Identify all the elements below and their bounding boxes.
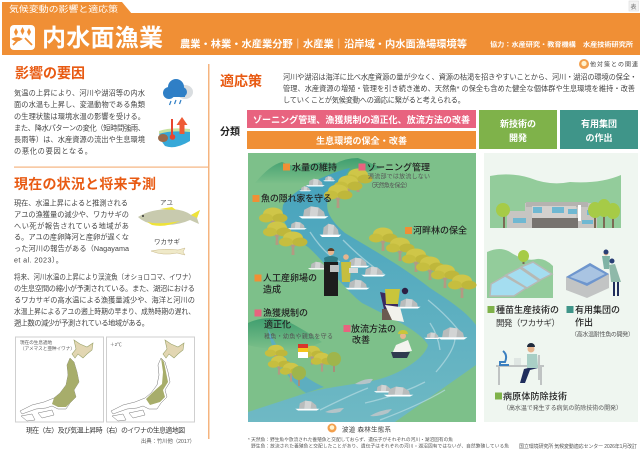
text: future projections: るワカサギの高水温による漁獲量減少や、海洋と河川の [14,296,195,304]
legend: forest ecosystem link [328,424,392,434]
label: pathogen control [495,390,622,412]
category bar: habitat [247,131,476,149]
measure labels: 放流方法の [351,323,396,334]
icon: ayu fish [138,198,200,226]
measure labels: （天然魚を保全） [368,182,411,190]
text: adaptation intro: していくことが気候変動への適応に繋がると考えられる。 [283,96,465,104]
cooperating organisations: 協力：水産研究・教育機構 水産技術研究所 [490,40,634,48]
text: causes body: 長雨等）は、水産資源の流出や生息環境 [14,135,145,144]
text: current status: へい死が報告されている地域があ [14,221,129,230]
column divider [208,64,210,439]
measure labels: 改善 [352,334,370,345]
legend: forest ecosystem link: 波道 森林生態系 [342,424,392,434]
section divider [14,166,208,168]
icon: temperature rise and river [158,117,190,147]
fish in the river [325,379,392,416]
rocks [288,176,467,410]
text: adaptation intro: 河川や湖沼は海洋に比べ水産資源の量が少なく、資源の枯渇を招きやすいことから、河川・湖沼の環境の保全・ [283,72,637,82]
water streaks [310,232,462,420]
category bar: zoning: ゾーニング管理、漁獲規制の適正化、放流方法の改善 [253,114,470,125]
illustration: research facility [490,174,621,228]
text: causes body: の生理状態は環境水温の影響を受ける。 [14,112,145,121]
panel: adaptation measures [220,72,638,422]
panel: causes [14,65,193,156]
label: seed production: 種苗生産技術の [496,304,559,315]
text: causes body: の悪化の要因となる。 [14,146,92,156]
text: current status: った河川の報告がある（Nagayama [14,244,129,253]
trees [259,168,476,386]
text: current status: et al. 2023）。 [14,256,63,264]
river [248,168,476,422]
category box: new technology: 開発 [509,132,527,143]
text: future projections: 将来、河川水温の上昇により渓流魚（オショロコマ、イワナ） [14,272,195,282]
text: adaptation intro [283,72,637,104]
measure labels: ゾーニング管理 [367,162,430,172]
measure labels: 魚の隠れ家を守る [261,192,332,204]
label: useful strains: 作出 [575,316,593,328]
text: causes body [14,88,146,156]
label: pathogen control: （高水温で発生する病気の防除技術の開発） [503,404,622,412]
measure labels: 河畔林の保全 [413,224,467,236]
map: current: （アメマスと亜种イワナ） [20,345,75,352]
measure labels: 水量の維持 [292,162,337,172]
measure labels: 造成 [263,284,281,294]
caption: 現在（左）及び気温上昇時（右）のイワナの生息適地図 [26,426,185,434]
footnote: * 天然魚：野生魚や放流された養殖魚と交配しておらず、遺伝子がそれぞれの河川・湖沼固有の魚 [248,436,453,443]
footnote [248,436,509,450]
panel: current status and projections [14,176,200,328]
illustration: fish ponds [487,249,553,298]
small corner tag [629,1,638,11]
category box: new technology: 新技術の [500,118,536,129]
text: future projections [14,272,195,328]
header tab: 気候変動の影響と適応策 [9,3,118,14]
legend: link to other measures [579,59,638,69]
credit: 国立環境研究所 気候変動適応センター 2026年1月改訂 [519,443,637,450]
label: seed production [488,304,560,328]
illustration: tank and researchers [566,250,621,298]
icon: wakasagi fish [151,238,185,255]
text: future projections: 遡上数の減少が予測されている地域がある。 [14,318,149,328]
icon: fish and water [10,25,35,50]
text: current status [14,198,129,264]
label: pathogen control: 病原体防除技術 [503,390,567,402]
illustration: river environment [248,153,476,422]
source: 出典：竹川他（2017） [141,437,195,445]
icon: ayu fish: アユ [160,198,173,206]
map: plus two degrees [106,337,194,422]
panel: technology and strains [484,153,638,422]
measure labels: 漁獲規制の [263,307,308,318]
label: seed production: 開発（ワカサギ） [496,318,560,328]
sign [298,344,308,358]
heading: adaptation: 適応策 [220,73,262,89]
people [324,248,412,358]
text: adaptation intro: 管理、水産資源の増殖・管理を引き続き進め、天然魚* の保全も含めた健全な個体群や生息環境を維持・改善 [283,84,635,93]
text: causes body: 面の水温も上昇し、変温動物である魚類 [14,100,146,109]
label: useful strains [566,304,634,338]
title: 内水面漁業 [42,25,163,52]
text: future projections: 水温上昇によるアユの遡上時期の早まり、成熟時期の遅れ、 [14,307,195,316]
measure labels: 源流部では放流しない [368,172,430,180]
heading: status: 現在の状況と将来予測 [14,176,156,192]
measure labels: 稚魚・幼魚や親魚を守る [264,332,333,340]
category box: useful strains: 有用集団 [581,118,617,129]
text: current status: 現在、水温上昇によると推測される [14,198,128,208]
footnote: 野生魚：放流された養殖魚と交配したことがあり、遺伝子はそれぞれの河川・湖沼固有ではないが、自然繁殖している魚 [251,442,509,450]
tributary [268,328,324,393]
label: useful strains: （高水温耐性魚の開発） [571,330,634,338]
text: current status: る。アユの産卵降河と産卵が遅くな [14,233,129,242]
measure labels: 適正化 [264,318,291,330]
text: future projections: の生息空間の縮小が予測されている。また、湖沼における [14,284,195,293]
legend: link to other measures: 他対策との関連 [590,60,638,68]
category box: new technology [479,110,557,149]
map: plus two degrees: ＋2℃ [110,342,122,347]
measure labels [252,162,467,345]
sector subtitle: 農業・林業・水産業分野｜水産業｜沿岸域・内水面漁場環境等 [180,38,467,50]
category box: useful strains [560,110,638,149]
map: current: 現在の生息適地 [20,339,53,346]
label: classification: 分類 [220,125,240,138]
measure labels: 人工産卵場の [263,272,317,283]
text: causes body: また、降水パターンの変化（短時間強雨、 [14,124,145,132]
figure: Iwana habitat maps [16,337,195,445]
small corner tag: 表 [630,3,637,11]
category bar: habitat: 生息環境の保全・改善 [316,135,407,146]
hill: left forest [248,318,322,350]
category box: useful strains: の作出 [585,132,613,143]
label: useful strains: 有用集団の [575,304,620,315]
header tab [2,2,132,14]
icon: rain cloud [163,79,193,105]
illustration: lab researcher [496,343,544,385]
category bar: zoning [247,110,476,128]
icon: wakasagi fish: ワカサギ [154,238,180,246]
heading: causes: 影響の要因 [15,65,85,81]
map: current [16,337,104,422]
text: causes body: 気温の上昇により、河川や湖沼等の内水 [14,88,145,98]
mountains [255,158,382,184]
text: current status: アユの漁獲量の減少や、ワカサギの [14,210,129,219]
header band [2,13,640,55]
